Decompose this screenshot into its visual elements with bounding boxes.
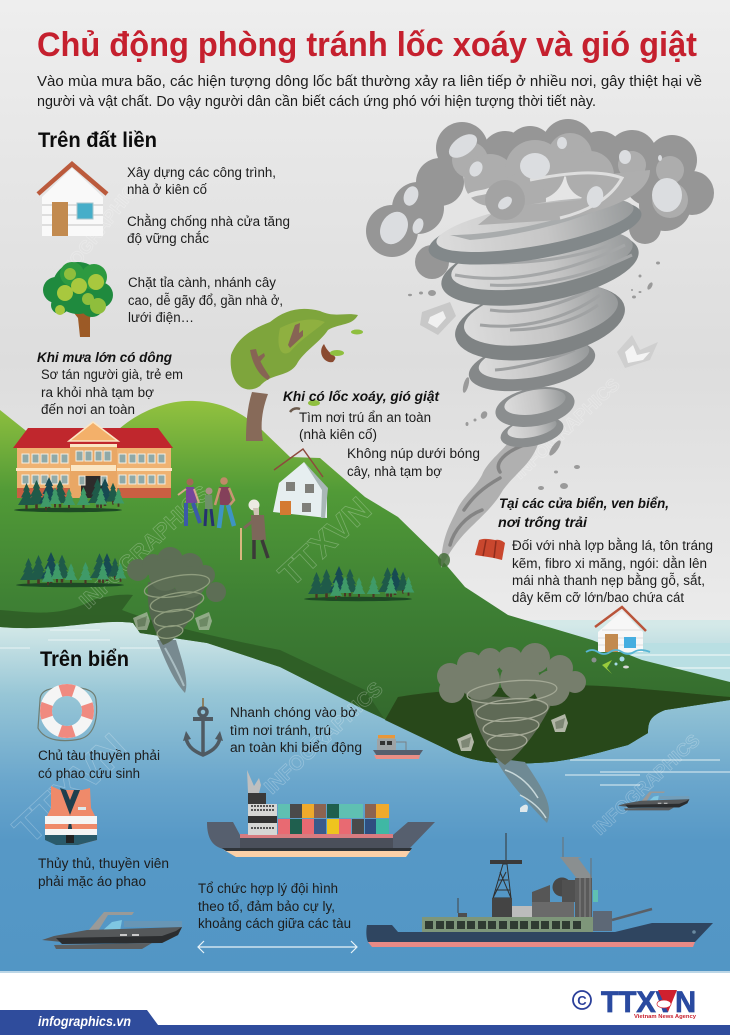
warship (366, 833, 713, 947)
text: life ring: Chủ tàu thuyền phải (38, 748, 160, 763)
family walking (178, 477, 234, 528)
text: get ashore (230, 705, 362, 755)
text: trim trees: lưới điện… (128, 310, 194, 325)
icon: green tree (43, 262, 113, 337)
tornado tail (438, 437, 540, 568)
containers (278, 804, 389, 834)
double arrow (198, 941, 357, 953)
text: heavy rain section: Sơ tán người già, trẻ em (41, 367, 183, 382)
text: heavy rain section (37, 349, 183, 417)
superstructure (247, 770, 277, 835)
watermarks: INFOGRAPHICS (47, 171, 148, 292)
pine trees right hill (304, 566, 414, 601)
speedboat left (42, 912, 182, 949)
logo: Vietnam News Agency (634, 1014, 697, 1020)
watermarks: TTXVN (272, 490, 379, 594)
logo: C (577, 993, 587, 1008)
sea (0, 620, 730, 972)
flying debris (408, 262, 660, 490)
icon: life jacket (45, 786, 97, 845)
man (215, 477, 234, 528)
watermarks: INFOGRAPHICS (509, 374, 624, 483)
text: build solid houses (127, 165, 290, 246)
icon: white house (38, 164, 107, 236)
text: get ashore: an toàn khi biển động (230, 740, 362, 755)
woman (178, 478, 200, 526)
bottom white band (0, 971, 730, 1035)
text: heavy rain section: ra khỏi nhà tạm bợ (41, 385, 154, 400)
intro text (37, 74, 702, 110)
watermarks: TTXVN (4, 724, 137, 853)
watermarks: TTXVN (527, 239, 622, 330)
hull (207, 822, 435, 850)
heading: on land: Trên đất liền (38, 129, 157, 152)
text: fleet formation: khoảng cách giữa các tàu (198, 916, 351, 931)
heading: at sea: Trên biển (40, 648, 129, 671)
icon: life ring (38, 686, 97, 741)
container ship (207, 770, 435, 857)
pine trees mid hill (16, 552, 126, 587)
text: coastal areas: Đối với nhà lợp bằng lá, tôn tráng (512, 538, 713, 553)
funnel tiers (436, 217, 644, 452)
text: coastal areas: mái nhà thanh nẹp bằng gỗ, sắt, (512, 573, 705, 588)
icon: anchor (183, 698, 223, 755)
speedboat right (618, 792, 689, 810)
watermarks: INFOGRAPHICS (589, 730, 704, 839)
superstructure (458, 837, 652, 931)
intro text: Vào mùa mưa bão, các hiện tượng dông lốc bất thường xảy ra liên tiếp ở nhiều nơi, gây thiệt hại về (37, 74, 702, 90)
text: life jacket: Thủy thủ, thuyền viên (38, 856, 169, 871)
footer bar (0, 1010, 730, 1035)
footer bar: infographics.vn (38, 1013, 131, 1029)
watermarks: INFOGRAPHICS (260, 678, 388, 799)
green deck with windows (422, 917, 593, 932)
text: fleet formation (198, 881, 351, 931)
text: when tornado: Khi có lốc xoáy, gió giật (283, 388, 440, 404)
text: when tornado: cây, nhà tạm bợ (347, 464, 442, 479)
text: trim trees: cao, dễ gãy đổ, gần nhà ở, (128, 293, 283, 308)
text: life jacket: phải mặc áo phao (38, 874, 146, 889)
text: when tornado: Tìm nơi trú ẩn an toàn (299, 410, 431, 425)
top swirl (424, 170, 650, 277)
mast (490, 833, 522, 917)
text: coastal areas: dây kẽm cỡ lớn/bao chứa cát (512, 590, 684, 605)
school building (13, 422, 173, 498)
title: Chủ động phòng tránh lốc xoáy và gió giật (37, 26, 697, 64)
text: trim trees: Chặt tỉa cành, nhánh cây (128, 275, 276, 290)
text: build solid houses: Xây dựng các công trình, (127, 165, 276, 180)
text: coastal areas: kẽm, fibro xi măng, ngói: dằn lên (512, 556, 707, 571)
text: when tornado: (nhà kiên cố) (299, 427, 377, 442)
main tornado (366, 119, 714, 568)
storm cloud (366, 119, 714, 279)
text: heavy rain section: Khi mưa lớn có dông (37, 349, 172, 365)
text: build solid houses: nhà ở kiên cố (127, 182, 207, 197)
hull (366, 923, 713, 942)
logo: TTXVN (601, 986, 696, 1019)
old man with cane (241, 500, 268, 560)
cloud highlights (375, 129, 682, 249)
coastal house (586, 607, 650, 674)
tornado tail over sea (157, 640, 186, 693)
third tornado (437, 643, 586, 823)
text: heavy rain section: đến nơi an toàn (41, 402, 135, 417)
small fishing boat (373, 735, 423, 759)
text: build solid houses: độ vững chắc (127, 231, 209, 246)
watermarks: INFOGRAPHICS (74, 480, 215, 614)
text: coastal areas (498, 495, 713, 605)
icon: roof tile (475, 539, 505, 560)
text: get ashore: Nhanh chóng vào bờ (230, 705, 357, 720)
second tornado (127, 547, 226, 693)
green hills and land (0, 401, 730, 764)
watermarks (4, 171, 704, 853)
hillside house (273, 449, 328, 518)
intro text: người và vật chất. Do vậy người dân cần biết cách ứng phó với hiện tượng thời tiết này. (37, 94, 596, 110)
text: fleet formation: theo tổ, đảm bảo cự ly, (198, 899, 335, 914)
text: build solid houses: Chằng chống nhà cửa tăng (127, 214, 290, 229)
text: life ring: có phao cứu sinh (38, 766, 140, 781)
pine trees by school (14, 477, 124, 512)
blown tree (231, 309, 363, 441)
text: fleet formation: Tổ chức hợp lý đội hình (198, 881, 338, 896)
text: trim trees (128, 275, 283, 325)
text: coastal areas: nơi trống trải (498, 514, 588, 530)
text: when tornado (283, 388, 480, 479)
text: get ashore: tìm nơi tránh, trú (230, 723, 331, 738)
text: life jacket (38, 856, 169, 889)
text: coastal areas: Tại các cửa biển, ven biển, (499, 495, 669, 511)
text: life ring (38, 748, 160, 781)
text: when tornado: Không núp dưới bóng (347, 446, 480, 461)
child (205, 488, 213, 526)
